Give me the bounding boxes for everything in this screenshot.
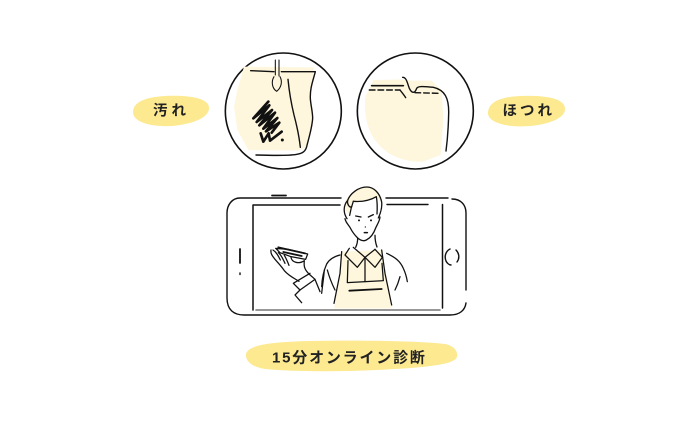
presenter: head from face crop [344,187,382,247]
label: 15-minute online diagnosis: 15分オンライン診断 [272,350,427,366]
label: stains [133,96,209,126]
presenter: hand holding garment [271,247,324,303]
panel: fraying seam circle [357,53,473,169]
garment outlines [251,71,315,155]
eyes and nose [358,219,372,228]
apron fill [334,250,392,308]
phone outline [227,196,466,315]
seam lines [369,77,449,151]
label: fraying: ほつれ [502,102,555,120]
hair fill [345,187,381,214]
panel: stain on tag circle [225,53,341,169]
smartphone and presenter [227,187,466,315]
tag string and loop [272,60,281,91]
label: fraying [488,96,565,126]
presenter: upper body from apron crop [322,247,407,308]
garment fill [234,67,314,151]
stain scribble [253,102,282,142]
fabric fill [365,79,443,162]
stain dot [281,138,284,141]
label: 15-minute online diagnosis [246,341,457,371]
label: stains: 汚れ [153,102,190,120]
